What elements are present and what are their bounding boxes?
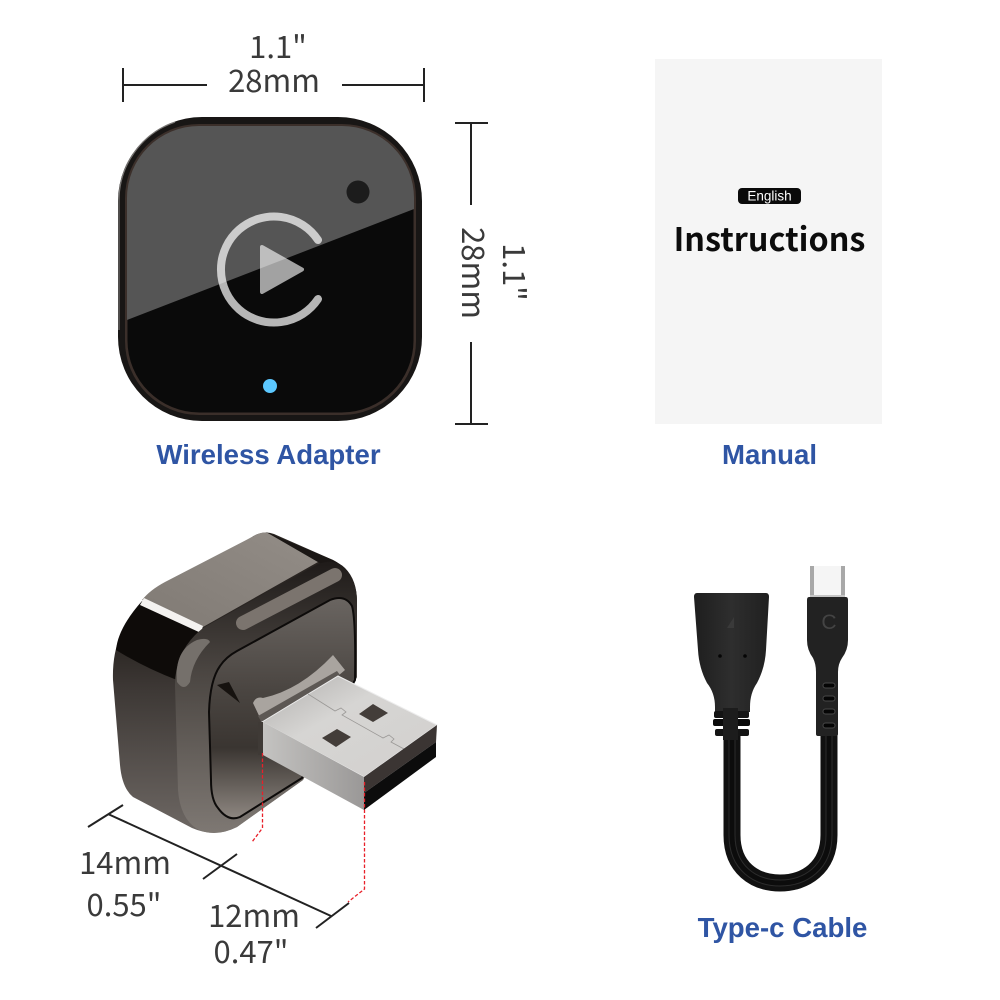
white highlight stripe xyxy=(140,598,203,633)
USB-C metal tip xyxy=(810,566,845,598)
overmold C mark: C xyxy=(821,611,837,634)
strain relief rings xyxy=(713,708,750,740)
panel shadow wedge xyxy=(217,682,240,703)
corner highlight xyxy=(177,639,210,687)
label: manual: Manual xyxy=(722,439,817,470)
glossy black band on left shoulder xyxy=(116,601,203,680)
bezel light strip xyxy=(243,575,335,623)
housing details xyxy=(718,617,747,658)
manual title: Instructions xyxy=(674,215,865,261)
plug holes xyxy=(359,704,388,722)
adapter 3D view with USB plug xyxy=(113,532,437,833)
plug opening xyxy=(364,725,437,810)
dimension text: 12mm / 0.47 inch: 12mm xyxy=(208,891,300,936)
play logo xyxy=(221,216,318,322)
language pill xyxy=(738,188,801,204)
glossy upper reflection xyxy=(127,126,414,320)
type-c cable xyxy=(694,566,848,883)
blue LED xyxy=(263,379,277,393)
width dimension: 1.1 inch / 28mm: 28mm xyxy=(228,56,320,101)
width dimension: 1.1 inch / 28mm xyxy=(123,22,424,102)
plug side face xyxy=(263,722,364,810)
plug top face xyxy=(262,676,437,777)
cable loop xyxy=(732,735,829,883)
front bezel xyxy=(175,562,357,833)
camera dot xyxy=(346,180,370,204)
female USB housing xyxy=(694,593,769,712)
USB-C overmold xyxy=(807,597,848,736)
red dashed guide lines xyxy=(252,753,364,902)
label: wireless adapter: Wireless Adapter xyxy=(156,439,381,470)
language pill: English xyxy=(747,188,792,204)
neck shadow xyxy=(258,671,340,723)
dimension text: 12mm / 0.47 inch: 0.47" xyxy=(214,927,288,972)
dimension text: 14mm / 0.55 inch: 14mm xyxy=(79,838,171,883)
depth dimension lines xyxy=(88,805,349,928)
top back edge xyxy=(266,532,355,590)
manual booklet xyxy=(655,59,882,424)
wireless adapter front view xyxy=(118,117,422,421)
width dimension: 1.1 inch / 28mm: 1.1" xyxy=(249,22,307,67)
body silhouette xyxy=(113,533,357,833)
label: type-c cable: Type-c Cable xyxy=(698,912,867,943)
height dimension: 1.1 inch / 28mm: 28mm xyxy=(453,227,498,319)
height dimension: 1.1 inch / 28mm: 1.1" xyxy=(494,243,539,301)
recessed panel xyxy=(209,598,355,818)
dimension text: 14mm / 0.55 inch xyxy=(79,838,171,925)
dimension text: 12mm / 0.47 inch xyxy=(208,891,300,972)
height dimension: 1.1 inch / 28mm xyxy=(453,123,539,424)
overmold grip slots xyxy=(823,683,835,728)
top face xyxy=(142,533,318,627)
plug neck xyxy=(253,655,345,722)
plug seam xyxy=(308,694,404,749)
dimension text: 14mm / 0.55 inch: 0.55" xyxy=(87,880,161,925)
infographic canvas xyxy=(82,34,882,964)
